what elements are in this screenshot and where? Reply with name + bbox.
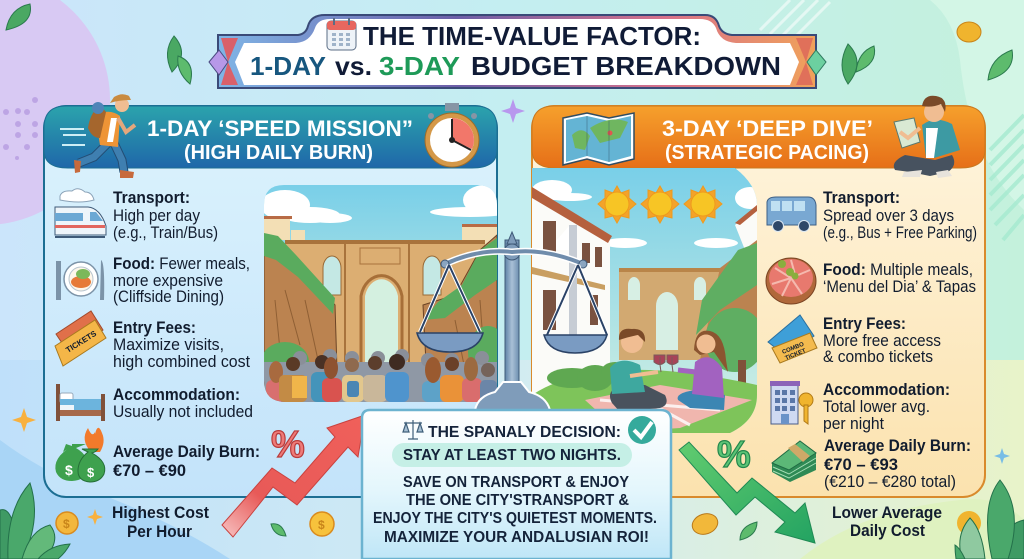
item: entry fees: More free access	[823, 331, 941, 350]
item: transport: Transport:	[113, 188, 190, 207]
illustration: Ronda town with picnic	[532, 168, 765, 433]
item: food	[823, 260, 976, 296]
item: entry fees: Entry Fees:	[113, 318, 196, 337]
item: food: ‘Menu del Dia’ & Tapas	[823, 277, 976, 296]
decor: coins, leaves and stars along the bottom: $	[63, 517, 70, 531]
item: food: Food: Multiple meals,	[823, 260, 973, 279]
icon: money bags and flame	[55, 428, 105, 482]
crowd	[264, 349, 497, 402]
header text: 3-day line 2: (STRATEGIC PACING)	[665, 142, 869, 164]
panel: 3-day deep dive	[532, 106, 985, 497]
icon: tickets	[55, 311, 106, 366]
callout: the decision	[362, 410, 671, 559]
label: highest cost per hour: Highest Cost	[112, 503, 209, 522]
decor: coins, leaves and stars along the bottom: $	[318, 518, 325, 532]
arrow: rising cost	[222, 415, 365, 537]
icon: tapas plate	[766, 258, 816, 304]
item: accommodation	[113, 385, 253, 421]
decor: bottom left foliage	[0, 483, 70, 559]
item: accommodation: Total lower avg.	[823, 397, 930, 416]
picnic woman	[667, 331, 728, 410]
icon: train	[55, 189, 106, 238]
list: 3-day items	[766, 188, 977, 491]
item: food: (Cliffside Dining)	[113, 287, 224, 306]
item: accommodation: Accommodation:	[823, 380, 950, 399]
icon: combo ticket: COMBO	[782, 342, 805, 356]
icon: bus	[767, 197, 816, 232]
icon: reading man	[894, 96, 960, 178]
panel header: 1-day	[44, 106, 497, 168]
decor: coins, leaves and stars along the bottom	[56, 509, 981, 540]
title line 2: BUDGET BREAKDOWN	[471, 51, 781, 81]
item: accommodation: per night	[823, 414, 884, 433]
item: accommodation: Accommodation:	[113, 385, 240, 404]
item: entry fees: Entry Fees:	[823, 314, 906, 333]
header text: 1-day line 1: 1-DAY ‘SPEED MISSION”	[147, 116, 413, 141]
label: lower average daily cost: Daily Cost	[850, 521, 925, 540]
item: transport: Transport:	[823, 188, 900, 207]
decor: purple star	[501, 99, 525, 123]
icon: calendar	[327, 18, 356, 50]
icon: stopwatch	[425, 103, 479, 167]
label: highest cost per hour	[112, 503, 209, 541]
label: lower average daily cost	[832, 503, 942, 540]
item: entry fees	[113, 318, 250, 371]
item: entry fees	[823, 314, 941, 366]
item: accommodation: Usually not included	[113, 402, 253, 421]
icon: combo ticket: TICKET	[785, 348, 807, 362]
icon: map	[563, 113, 634, 165]
item: average daily burn: €70 – €93	[824, 455, 898, 474]
picnic man	[610, 329, 667, 412]
item: average daily burn	[824, 436, 971, 491]
picnic blanket	[585, 385, 752, 432]
item: average daily burn: Average Daily Burn:	[824, 436, 971, 455]
item: transport	[113, 188, 218, 242]
decor: orange star	[12, 408, 36, 432]
callout heading: THE SPANALY DECISION:	[428, 424, 621, 441]
item: accommodation	[823, 380, 950, 433]
icon: small scales	[403, 420, 423, 439]
item: food	[113, 254, 250, 306]
icon: check badge	[628, 416, 656, 444]
callout body text	[373, 474, 657, 546]
label: lower average daily cost: Lower Average	[832, 503, 942, 522]
item: average daily burn: Average Daily Burn:	[113, 442, 260, 461]
percent sign: green: %	[717, 434, 751, 476]
list: 1-day items	[55, 188, 260, 482]
item: transport	[823, 188, 977, 242]
illustration: Ronda bridge with crowd	[260, 185, 510, 402]
suns	[598, 186, 722, 223]
highlight: stay at least two nights	[392, 443, 632, 467]
illustration: balance scale	[417, 232, 607, 410]
arrow: falling cost	[679, 442, 815, 543]
title line 2: 1-DAY	[250, 51, 326, 81]
highlight: stay at least two nights: STAY AT LEAST TWO NIGHTS.	[403, 447, 621, 464]
decor: blue star	[994, 448, 1010, 464]
item: average daily burn	[113, 442, 260, 480]
title banner	[209, 15, 826, 88]
icon: plate	[56, 260, 104, 300]
icon: money bags and flame: $	[65, 462, 73, 478]
panel header: 3-day	[532, 106, 985, 168]
icon: bed	[56, 384, 105, 421]
icon: running traveller	[60, 94, 135, 178]
icon: combo ticket	[768, 315, 817, 363]
icon: tickets: TICKETS	[64, 329, 99, 355]
panel: 1-day speed mission	[44, 106, 497, 497]
callout body text: SAVE ON TRANSPORT & ENJOY	[403, 474, 629, 491]
item: average daily burn: (€210 – €280 total)	[824, 472, 956, 491]
item: transport: (e.g., Bus + Free Parking)	[823, 223, 977, 242]
item: transport: High per day	[113, 206, 200, 225]
icon: money bags and flame: $	[87, 465, 95, 480]
item: food: Food: Fewer meals,	[113, 254, 250, 273]
title line 1: THE TIME-VALUE FACTOR:	[363, 21, 701, 51]
item: food: more expensive	[113, 271, 223, 290]
label: highest cost per hour: Per Hour	[127, 522, 192, 541]
decor: bottom right foliage	[955, 480, 1024, 559]
item: entry fees: Maximize visits,	[113, 335, 224, 354]
header text: 3-day line 1: 3-DAY ‘DEEP DIVE’	[662, 116, 873, 141]
percent sign: red: %	[271, 424, 305, 466]
decor: top right coin and leaves	[842, 22, 1012, 84]
header text: 1-day line 2: (HIGH DAILY BURN)	[184, 142, 373, 164]
title line 2: 3-DAY	[379, 51, 460, 81]
decor: top left leaves	[6, 4, 192, 84]
title line 2: vs.	[335, 51, 372, 81]
item: entry fees: high combined cost	[113, 352, 250, 371]
icon: hotel and key	[770, 381, 813, 424]
item: average daily burn: €70 – €90	[113, 461, 186, 480]
callout body text: ENJOY THE CITY'S QUIETEST MOMENTS.	[373, 510, 657, 527]
callout body text: MAXIMIZE YOUR ANDALUSIAN ROI!	[384, 529, 649, 546]
item: transport: (e.g., Train/Bus)	[113, 223, 218, 242]
icon: cash stack	[772, 441, 816, 482]
item: entry fees: & combo tickets	[823, 347, 933, 366]
callout body text: THE ONE CITY'STRANSPORT &	[406, 492, 629, 509]
item: transport: Spread over 3 days	[823, 206, 954, 225]
